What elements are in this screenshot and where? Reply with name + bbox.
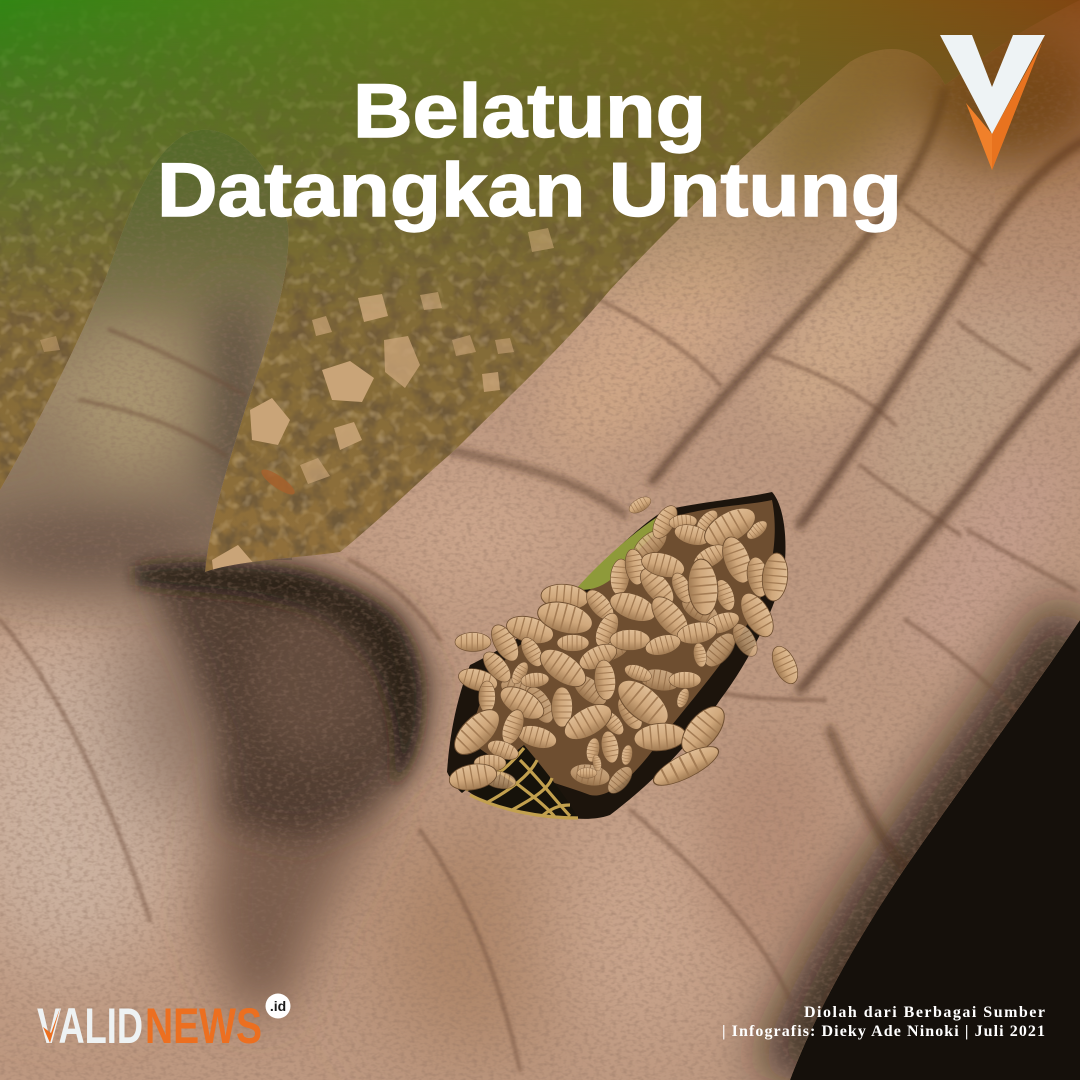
dark lower-right backdrop: [790, 620, 1080, 1080]
pod with maggots: [447, 492, 790, 819]
logo: V mark: [940, 35, 1045, 170]
logo: Validnews.id: VALID: [37, 998, 143, 1054]
maggots: [447, 500, 790, 794]
hand outer edge shadow: [790, 620, 1080, 1080]
title: [157, 69, 902, 233]
thumb: [0, 130, 292, 628]
logo: Validnews.id: [37, 994, 290, 1054]
finger shading: [505, 17, 1080, 960]
pod shell: [447, 492, 786, 819]
source credit: | Infografis: Dieky Ade Ninoki | Juli 2021: [722, 1023, 1045, 1040]
green pod flesh: [575, 510, 668, 590]
logo: Validnews.id: NEWS: [145, 998, 262, 1054]
lower palm soft shadow: [205, 780, 390, 1020]
source credit: [722, 1004, 1045, 1040]
palm shadow from thumb: [150, 562, 434, 840]
title: Datangkan Untung: [157, 148, 902, 233]
colour gradient overlay: [0, 0, 1080, 281]
finger gaps: [450, 90, 1080, 868]
skin creases: [0, 205, 1075, 1070]
loose maggot top: [626, 494, 654, 516]
pod golden inner: [470, 500, 775, 796]
filler maggots: [483, 524, 762, 798]
source credit: Diolah dari Berbagai Sumber: [804, 1004, 1045, 1021]
loose maggot right: [767, 642, 803, 688]
thumb base lobe: [250, 610, 370, 750]
palm base shading: [0, 475, 740, 1060]
patterned rind: [447, 745, 578, 818]
palm dark fold near thumb: [135, 562, 422, 790]
title: Belatung: [353, 69, 706, 154]
logo: Validnews.id: .id: [270, 998, 286, 1014]
